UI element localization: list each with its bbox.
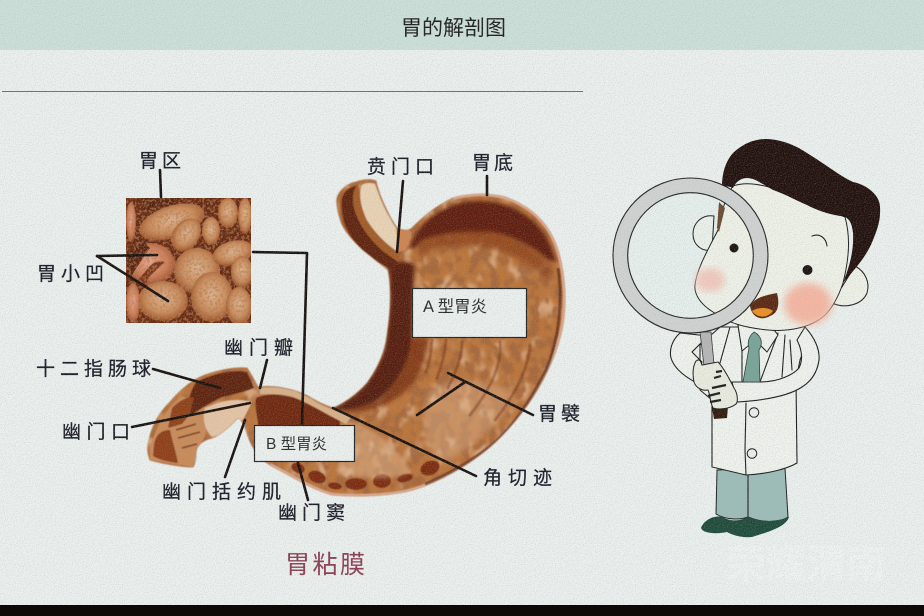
doctor lab coat [700,327,807,475]
stomach mucosa caption: 胃粘膜 [285,551,368,579]
coat buttons [749,408,759,417]
doctor shoes [701,517,789,537]
longitudinal folds [426,340,530,420]
magnifier ring [620,186,760,326]
callout: type A gastritis: A 型胃炎 [423,297,487,316]
header band [0,0,924,50]
leader lines [97,170,533,500]
divider line [2,91,583,92]
anatomical labels: 幽门口 [62,421,136,443]
title: 胃的解剖图 [401,17,506,40]
doctor figure with magnifying glass [613,139,880,537]
callout: type A gastritis [412,288,526,338]
stomach pale rim [270,194,565,496]
hair sideburn through lens [717,202,725,232]
duodenum pale mucosa [204,400,252,437]
coat center seam [745,403,746,475]
pyloric canal dark region [255,394,340,428]
fundus dark crescent [410,201,556,262]
callout: type B gastritis [254,426,354,462]
panel: gastric mucosa magnified square [125,196,256,325]
lesser curvature dark band [333,262,414,410]
anatomical labels: 幽门瓣 [224,337,299,359]
left cheek blush [695,268,725,292]
magnifier lens [626,192,754,320]
doctor trousers [716,468,788,522]
right sleeve [732,327,819,402]
anatomical labels: 十二指肠球 [36,358,156,380]
watermark: 荣耀渭南 [726,543,886,587]
shirt collar [738,325,778,352]
right ear [832,266,868,306]
anatomical labels: 胃襞 [538,403,584,425]
callout: type B gastritis: B 型胃炎 [266,435,327,453]
necktie [743,332,761,382]
coat lapels [720,325,792,382]
stomach interior shading and texture [148,180,566,496]
magnifier handle [700,332,714,366]
anatomical labels: 幽门窦 [278,502,350,524]
lower body pale zone [423,381,515,465]
panel: stomach illustration [146,178,566,498]
anatomical labels: 胃小凹 [37,263,109,285]
eyes [730,244,738,252]
bottom black bar [0,605,924,616]
esophagus layers [340,184,402,272]
anatomical labels: 胃底 [472,152,516,174]
anatomical labels: 角切迹 [483,467,558,489]
left ear [693,216,714,250]
duodenum base stripes [150,396,210,467]
antrum pale mottling [338,420,410,478]
greater curvature dark edge [425,268,560,484]
left sleeve [670,333,708,382]
mouth [750,293,778,318]
hair [722,139,880,283]
anatomical labels [36,151,584,524]
pyloric antrum folds [290,458,442,490]
stomach outer wall [148,180,565,496]
anatomical labels: 胃区 [139,151,185,172]
anatomical labels: 贲门口 [367,156,439,178]
hand gripping handle [693,360,737,409]
duodenum dark folds [188,371,254,416]
face [695,184,849,330]
eyebrow [812,235,827,246]
right cheek blush [784,283,832,325]
anatomical labels: 幽门括约肌 [162,481,287,503]
